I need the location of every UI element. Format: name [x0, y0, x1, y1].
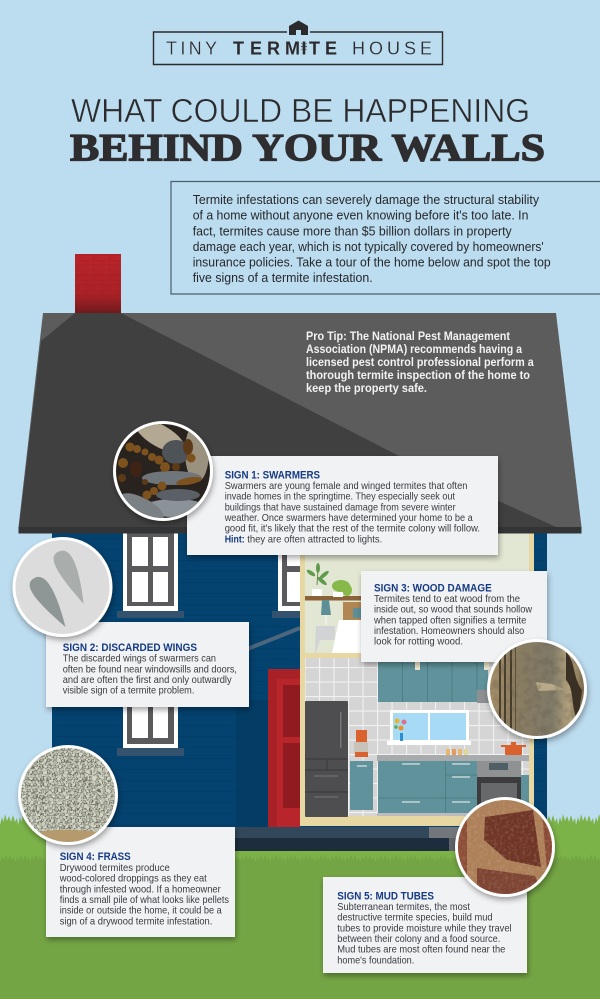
pro tip text: keep the property safe.	[306, 381, 427, 395]
icon: orange pot	[501, 742, 526, 755]
pro tip text: Pro Tip: The National Pest Management	[306, 329, 510, 343]
icon: logo house	[289, 20, 308, 35]
heading: SIGN 3: WOOD DAMAGE	[374, 582, 492, 594]
body text: and are often the first and only outwardly	[63, 675, 232, 686]
intro text panel: Termite infestations can severely damage the structural stability	[193, 192, 539, 207]
house walls	[52, 530, 547, 828]
body text: wood-colored droppings as they eat	[59, 874, 207, 885]
body text	[63, 654, 237, 697]
title line 1: WHAT COULD BE HAPPENING	[71, 93, 530, 130]
pro tip text: licensed pest control professional perform a	[306, 355, 534, 369]
body text: when tapped often signifies a termite	[373, 615, 526, 626]
panel: sign 1 swarmers	[113, 412, 498, 555]
roof eave	[18, 527, 582, 534]
stove	[477, 761, 521, 815]
body text: sign of a drywood termite infestation.	[60, 916, 212, 927]
kitchen window	[387, 710, 471, 745]
body text: tubes to provide moisture while they travel	[337, 923, 512, 934]
pro tip text	[306, 329, 534, 395]
photo: mud tubes	[455, 797, 556, 897]
body text: Drywood termites produce	[60, 863, 170, 874]
photo: discarded wings	[12, 537, 113, 637]
body text: look for rotting wood.	[374, 637, 463, 648]
body text: destructive termite species, build mud	[337, 913, 493, 924]
intro text panel: five signs of a termite infestation.	[193, 270, 373, 285]
card 2 background	[46, 622, 249, 707]
body text: they are often attracted to lights.	[247, 534, 382, 545]
counter and lower cabinets	[350, 755, 529, 816]
spice jars	[446, 749, 468, 755]
card 1 background	[187, 456, 498, 555]
icon: lamp	[321, 600, 331, 625]
body text: invade homes in the springtime. They especially seek out	[225, 492, 455, 503]
body text: inside out, so wood that sounds hollow	[374, 605, 532, 616]
photo: swarmers	[113, 412, 213, 526]
body text: Mud tubes are most often found near the	[337, 945, 505, 956]
body text: finds a small pile of what looks like pellets	[60, 895, 229, 906]
roof	[18, 313, 582, 534]
refrigerator	[305, 701, 348, 817]
body text: Hint:	[225, 534, 245, 545]
roof shadow	[19, 313, 556, 527]
body text: between their colony and a food source.	[337, 934, 500, 945]
coffee maker	[354, 730, 368, 757]
body text: infestation. Homeowners should also	[374, 626, 524, 637]
logo: Tiny Termite House	[154, 20, 442, 64]
window: upper right	[272, 533, 300, 618]
kitchen wall tiles	[305, 658, 529, 816]
body text: Termites tend to eat wood from the	[374, 594, 520, 605]
body text: weather. Once swarmers have determined your home to be a	[224, 513, 473, 524]
wall shaded column by door	[236, 700, 268, 828]
logo: Tiny Termite House: TERMITE	[233, 38, 337, 58]
icon: flowers	[394, 718, 406, 741]
intro text panel: of a home without anyone even knowing before it's too late. In	[193, 208, 528, 223]
icon: leafy plant	[332, 580, 352, 597]
bed	[332, 602, 361, 653]
card 3 background	[361, 571, 547, 662]
cutaway interior	[300, 530, 534, 826]
grass	[0, 813, 600, 999]
body text: Subterranean termites, the most	[337, 902, 470, 913]
body text	[337, 902, 512, 966]
intro text panel: fact, termites cause more than $5 billion dollars in property	[193, 223, 512, 238]
nightstand	[315, 626, 335, 653]
photo: wood damage	[487, 639, 588, 739]
window: upper left	[117, 533, 184, 618]
porch roof line	[240, 628, 300, 652]
heading: SIGN 4: FRASS	[60, 851, 131, 863]
intro text panel: insurance policies. Take a tour of the home below and spot the top	[193, 255, 551, 270]
heading: SIGN 2: DISCARDED WINGS	[63, 642, 197, 654]
logo: Tiny Termite House: HOUSE	[352, 38, 432, 58]
icon: palm plant	[306, 563, 330, 596]
body text: buildings that have sustained damage from severe winter	[225, 502, 456, 513]
pro tip text: thorough termite inspection of the home to	[306, 368, 530, 382]
body text: Swarmers are young female and winged termites that often	[225, 481, 468, 492]
body text: The discarded wings of swarmers can	[63, 654, 216, 665]
intro text panel	[171, 182, 600, 294]
body text	[373, 594, 532, 648]
heading: SIGN 5: MUD TUBES	[337, 890, 434, 902]
photo: frass	[14, 743, 122, 847]
card 4 background	[46, 827, 235, 937]
body text: home's foundation.	[337, 955, 414, 966]
heading: SIGN 1: SWARMERS	[225, 469, 320, 481]
body text: through infested wood. If a homeowner	[60, 884, 221, 895]
panel: sign 5 mud tubes	[323, 797, 556, 973]
body text: good fit, it's likely that the rest of the termite colony will follow.	[225, 524, 480, 535]
body text: often be found near windowsills and doors,	[63, 664, 237, 675]
card 5 background	[323, 877, 527, 973]
body text	[59, 863, 229, 927]
intro text panel: damage each year, which is not typically covered by homeowners'	[193, 239, 544, 254]
title line 2: BEHIND YOUR WALLS	[70, 126, 545, 170]
chimney	[75, 254, 121, 313]
body text: visible sign of a termite problem.	[63, 686, 194, 697]
panel: sign 4 frass	[14, 743, 235, 937]
panel: sign 2 discarded wings	[12, 537, 249, 707]
logo: Tiny Termite House: TINY	[166, 38, 217, 58]
body text: inside or outside the home, it could be a	[60, 906, 222, 917]
window: lower left	[117, 695, 184, 756]
front door	[268, 669, 300, 827]
pro tip text: Association (NPMA) recommends having a	[306, 342, 522, 356]
floor divider	[305, 653, 529, 658]
upper cabinets	[378, 660, 499, 703]
upper bedroom	[305, 530, 529, 653]
icon: termite in logo	[301, 43, 307, 50]
foundation steps	[52, 827, 479, 851]
panel: sign 3 wood damage	[361, 571, 588, 739]
body text	[224, 481, 480, 545]
